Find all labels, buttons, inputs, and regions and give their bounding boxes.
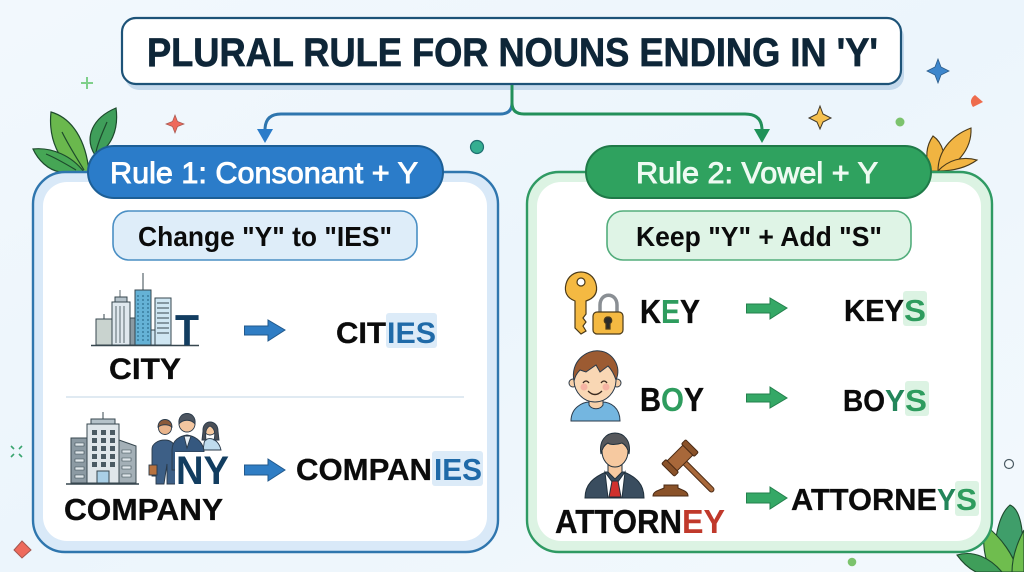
word: BOY: B: [640, 381, 661, 418]
rule 2 pill heading: Rule 2: Vowel + Y: [636, 157, 878, 190]
arrow: city to cities: [244, 320, 285, 341]
word: CITIES: IES: [387, 317, 436, 350]
arrow: attorney to attorneys: [746, 487, 787, 509]
word: KEY: Y: [680, 293, 700, 330]
divider: [66, 396, 464, 398]
icon: boy: [569, 351, 621, 421]
word: ATTORNEY: ATTORN: [555, 503, 682, 540]
company ending letters NY: NY: [176, 449, 229, 493]
icon: key and padlock: [565, 272, 623, 334]
icon: attorney: [585, 433, 644, 498]
icon: gavel: [653, 440, 725, 503]
word: KEYS: S: [904, 293, 926, 328]
rule 2 pill heading: [586, 146, 931, 198]
word: COMPANIES: IES: [434, 452, 482, 487]
title banner: [122, 18, 904, 90]
connector arrow to rule 2: [512, 85, 770, 143]
title banner: PLURAL RULE FOR NOUNS ENDING IN 'Y': [147, 31, 878, 75]
arrow: boy to boys: [746, 387, 787, 408]
rule 2 instruction: [607, 211, 911, 260]
decoration: left leaves: [33, 108, 117, 172]
word: BOYS: S: [905, 383, 927, 418]
word: KEY: [640, 293, 700, 330]
decoration: right orange leaves: [927, 128, 977, 171]
word: BOY: [640, 381, 704, 418]
word: CITY: CITY: [109, 353, 181, 386]
word: KEY: E: [661, 293, 680, 330]
connector arrow to rule 1: [257, 85, 512, 143]
arrow: company to companies: [244, 459, 285, 481]
rule 2 instruction: Keep "Y" + Add "S": [636, 221, 882, 252]
word: ATTORNEYS: ATTORNE: [791, 482, 937, 517]
word: BOYS: BO: [843, 383, 885, 418]
word: ATTORNEYS: Y: [937, 482, 956, 517]
rule 1 instruction: [113, 211, 417, 260]
rule 1 pill heading: Rule 1: Consonant + Y: [110, 157, 418, 190]
word: COMPANIES: COMPAN: [296, 452, 432, 487]
rule 1 pill heading: [88, 146, 443, 198]
word: ATTORNEYS: S: [956, 482, 977, 517]
word: ATTORNEY: EY: [682, 503, 725, 540]
arrow: key to keys: [746, 298, 787, 319]
icon: business people: [149, 414, 221, 484]
word: CITIES: [336, 313, 437, 350]
word: BOYS: [843, 381, 929, 418]
word: COMPANY: COMPANY: [64, 492, 223, 527]
word: BOY: O: [661, 381, 684, 418]
rule 1 instruction: Change "Y" to "IES": [138, 221, 392, 252]
icon: city skyline: [91, 273, 199, 346]
word: CITIES: CIT: [336, 317, 386, 350]
word: KEY: K: [640, 293, 661, 330]
word: BOY: Y: [684, 381, 704, 418]
decoration: bottom right leaves: [957, 505, 1024, 572]
city ending letter T: T: [175, 306, 199, 355]
panel: rule 1: [33, 146, 498, 552]
icon: office building: [66, 412, 139, 484]
word: BOYS: Y: [885, 383, 905, 418]
panel: rule 2: [527, 146, 992, 552]
word: KEYS: KEY: [844, 293, 904, 328]
